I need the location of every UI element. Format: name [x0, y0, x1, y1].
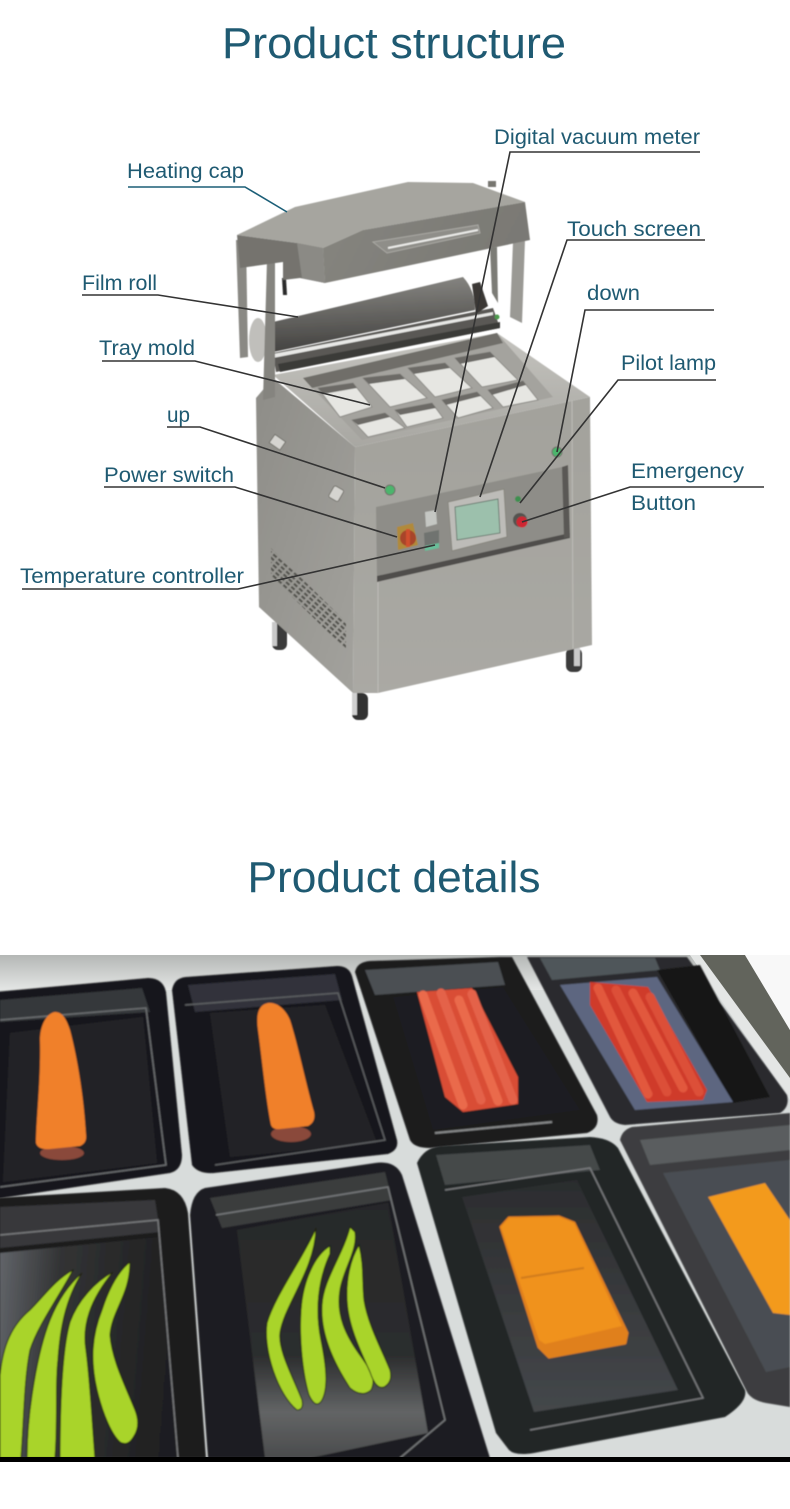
label: Heating cap — [127, 160, 287, 212]
bottom black edge — [0, 1457, 790, 1462]
label: Tray mold — [99, 337, 370, 405]
tray 5 with green beans — [0, 1188, 206, 1458]
side latches — [269, 434, 344, 502]
heating cap — [237, 181, 530, 283]
label: Power switch: Power switch — [104, 464, 234, 487]
label: up: up — [167, 404, 190, 427]
label: up — [167, 404, 385, 488]
touch screen — [448, 489, 507, 551]
roller bar — [273, 308, 500, 372]
label: Pilot lamp: Pilot lamp — [621, 352, 716, 375]
tray 3 with meat — [355, 957, 598, 1148]
title: Product structure: Product structure — [222, 19, 566, 68]
label: Pilot lamp — [520, 352, 716, 503]
label: Touch screen — [480, 218, 705, 497]
label: Emergency Button: Button — [631, 492, 696, 515]
label: Temperature controller — [20, 545, 435, 589]
label: down: down — [587, 282, 640, 305]
label: down — [557, 282, 714, 452]
temperature controller — [424, 530, 439, 551]
rear posts — [490, 247, 498, 303]
tray 6 with green beans — [190, 1162, 490, 1458]
emergency button — [513, 513, 528, 528]
lift arms — [236, 240, 248, 358]
label: Emergency Button — [522, 460, 764, 522]
down button — [552, 447, 562, 457]
label: Temperature controller: Temperature controller — [20, 565, 244, 588]
photo: skin-packed trays — [0, 955, 790, 1462]
pilot lamp — [515, 496, 521, 502]
film roll — [270, 277, 475, 352]
digital vacuum meter — [425, 510, 437, 527]
control panel recess — [376, 467, 570, 580]
up button — [385, 485, 395, 495]
label: Film roll: Film roll — [82, 272, 157, 295]
label: Digital vacuum meter — [435, 126, 700, 512]
power switch — [397, 523, 418, 550]
tray 1 with carrot — [0, 978, 182, 1199]
caster wheels — [272, 622, 582, 720]
front pillar lines — [378, 400, 573, 693]
cabinet side face — [256, 378, 355, 693]
photo background — [0, 955, 790, 1458]
tray 2 with carrot — [172, 966, 397, 1173]
tray mold cavities — [318, 352, 538, 437]
label: Touch screen: Touch screen — [567, 218, 701, 241]
tray 7 with orange slice — [417, 1137, 745, 1454]
label: Digital vacuum meter: Digital vacuum meter — [494, 126, 700, 149]
top plate — [273, 333, 590, 447]
label: Emergency Button: Emergency — [631, 460, 745, 483]
machine illustration — [236, 181, 592, 720]
roll wheel — [249, 318, 267, 362]
label: Power switch — [104, 464, 397, 537]
label: Tray mold: Tray mold — [99, 337, 195, 360]
tray 4 with meat — [527, 957, 788, 1125]
cabinet front face — [353, 397, 592, 693]
film clamp — [472, 282, 488, 314]
label: Film roll — [82, 272, 298, 317]
label: Heating cap: Heating cap — [127, 160, 244, 183]
title: Product details: Product details — [248, 853, 540, 902]
tray 8 with orange slice — [620, 1113, 790, 1407]
side vent — [271, 548, 346, 650]
tray mold well — [303, 333, 553, 440]
